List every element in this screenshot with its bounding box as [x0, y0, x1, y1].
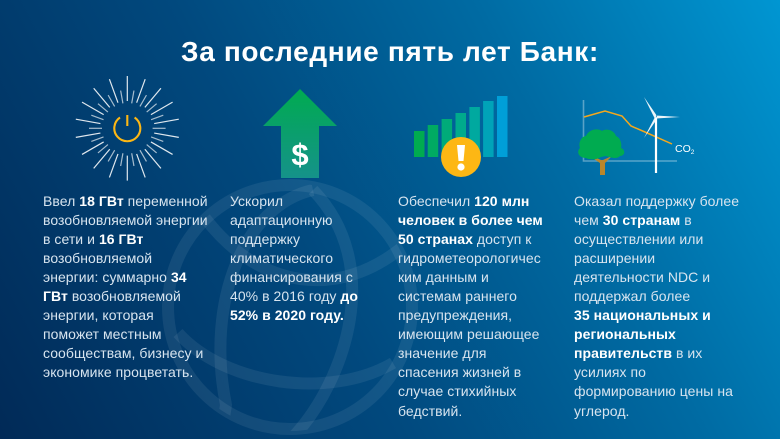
text: early warning: предупреждения, — [398, 307, 512, 323]
text: NDC support: поддержал более — [574, 288, 690, 304]
text: NDC support: деятельности NDC и — [574, 269, 710, 285]
text: NDC support: расширении — [574, 250, 655, 266]
text: renewable energy: в сети и 16 ГВт — [43, 231, 143, 247]
text: renewable energy: Ввел 18 ГВт переменной — [43, 193, 208, 209]
text: NDC support: 35 национальных и — [574, 307, 711, 323]
text: NDC support: правительств в их — [574, 345, 702, 361]
text: climate finance: финансирования с — [230, 269, 353, 285]
text: early warning: гидрометеорологичес — [398, 250, 541, 266]
text: NDC support: усилиях по — [574, 364, 646, 380]
text: renewable energy: возобновляемой — [43, 250, 152, 266]
icon: emissions chart with tree and wind turbine: 2 — [691, 149, 695, 156]
globe watermark — [162, 179, 418, 435]
text: NDC support: региональных — [574, 326, 676, 342]
icon: green arrow with dollar: $ — [291, 137, 309, 172]
text: NDC support: Оказал поддержку более — [574, 193, 739, 209]
text: early warning: ким данным и — [398, 269, 489, 285]
text: NDC support: осуществлении или — [574, 231, 703, 247]
text: renewable energy: энергии: суммарно 34 — [43, 269, 187, 285]
text: early warning: случае стихийных — [398, 383, 516, 399]
text: early warning: бедствий. — [398, 403, 462, 419]
text: renewable energy: энергии, которая — [43, 307, 154, 323]
text: renewable energy: возобновляемой энергии — [43, 212, 208, 228]
title: За последние пять лет Банк: — [181, 36, 599, 67]
text: early warning: Обеспечил 120 млн — [398, 193, 529, 209]
text: NDC support: углерод. — [574, 403, 629, 419]
text: early warning: системам раннего — [398, 288, 517, 304]
text: renewable energy — [43, 193, 208, 380]
text: early warning: имеющим решающее — [398, 326, 539, 342]
text: renewable energy: экономике процветать. — [43, 364, 193, 380]
text: climate finance: поддержку — [230, 231, 300, 247]
text: climate finance: 40% в 2016 году до — [230, 288, 358, 304]
text: early warning: спасения жизней в — [398, 364, 521, 380]
icon: emissions chart with tree and wind turbine: CO — [675, 143, 691, 155]
text: early warning: 50 странах доступ к — [398, 231, 531, 247]
text: NDC support: формированию цены на — [574, 383, 733, 399]
text: renewable energy: поможет местным — [43, 326, 162, 342]
text: early warning: значение для — [398, 345, 486, 361]
text: climate finance — [230, 193, 358, 323]
text: climate finance: климатического — [230, 250, 333, 266]
text: renewable energy: сообществам, бизнесу и — [43, 345, 203, 361]
text: NDC support: чем 30 странам в — [574, 212, 692, 228]
text: early warning — [398, 193, 543, 419]
text: climate finance: 52% в 2020 году. — [230, 307, 344, 323]
text: climate finance: адаптационную — [230, 212, 333, 228]
text: renewable energy: ГВт возобновляемой — [43, 288, 181, 304]
text: NDC support — [574, 193, 739, 419]
text: early warning: человек в более чем — [398, 212, 543, 228]
text: climate finance: Ускорил — [230, 193, 283, 209]
